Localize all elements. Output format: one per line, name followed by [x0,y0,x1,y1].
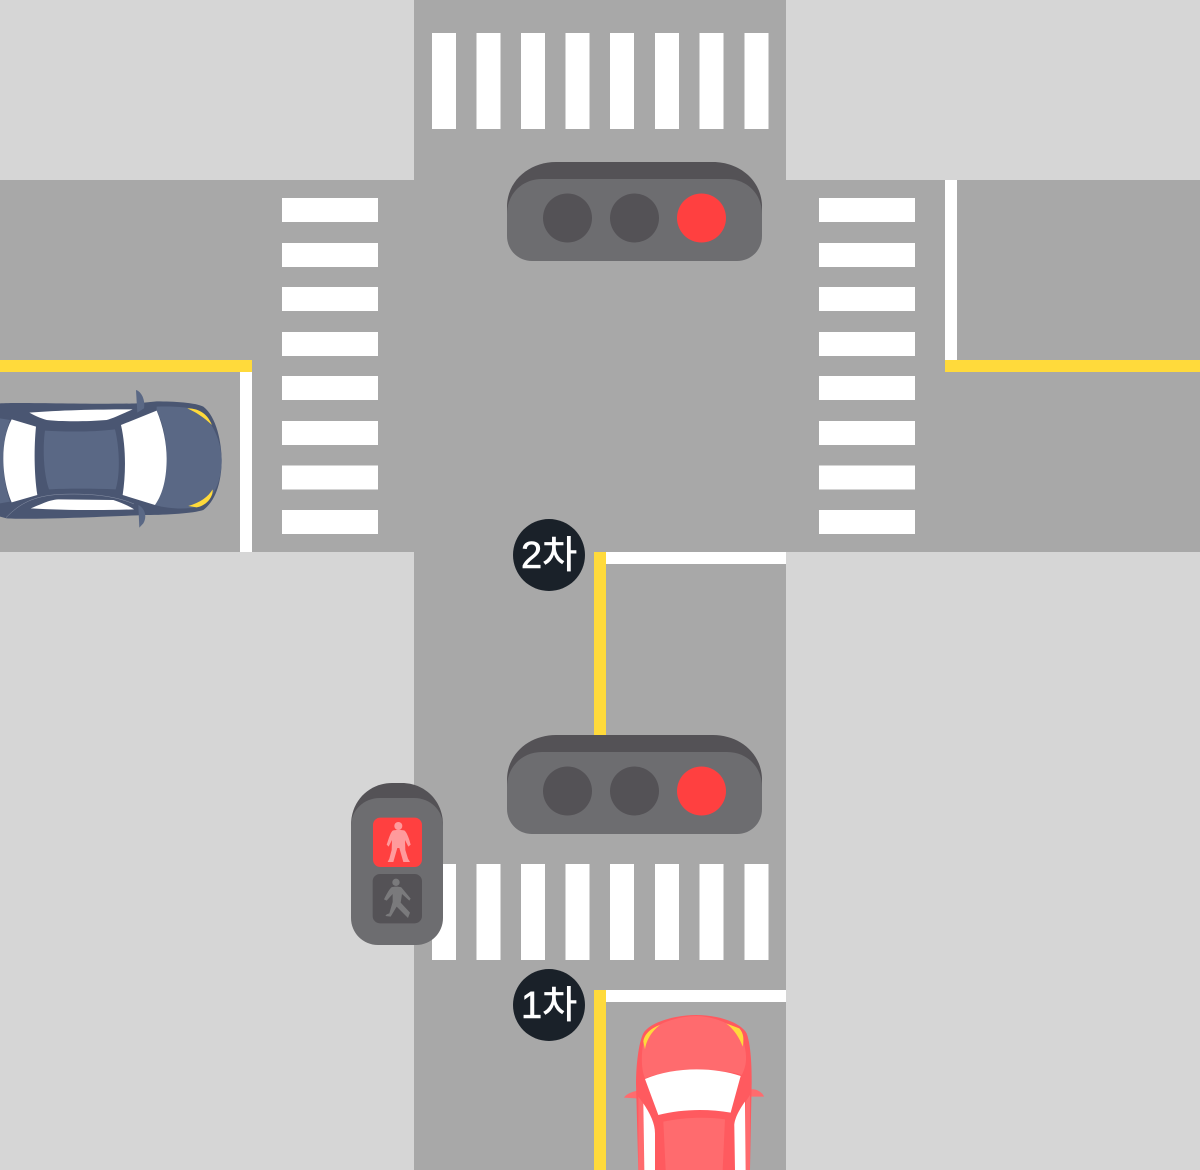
pedestrian signal [351,783,443,945]
badge: 2차: 2차 [521,535,577,577]
lane lines: right approach [945,180,1200,372]
crosswalk: top [432,33,768,129]
badge: 1차: 1차 [521,985,577,1027]
crosswalk: left [282,198,378,534]
traffic light: bottom [507,735,762,834]
car: blue, left approach [0,390,222,528]
lane lines: left approach [0,360,252,552]
lane lines: first stop line [594,990,786,1170]
badge: 1차 [513,969,585,1041]
grey walking pedestrian [373,874,422,923]
badge: 2차 [513,519,585,591]
lane lines: second stop line [594,552,786,742]
crosswalk: bottom [432,864,768,960]
traffic light: top [507,162,762,261]
car: red, bottom approach [624,1015,764,1170]
crosswalk: right [819,198,915,534]
red standing pedestrian [373,818,422,923]
